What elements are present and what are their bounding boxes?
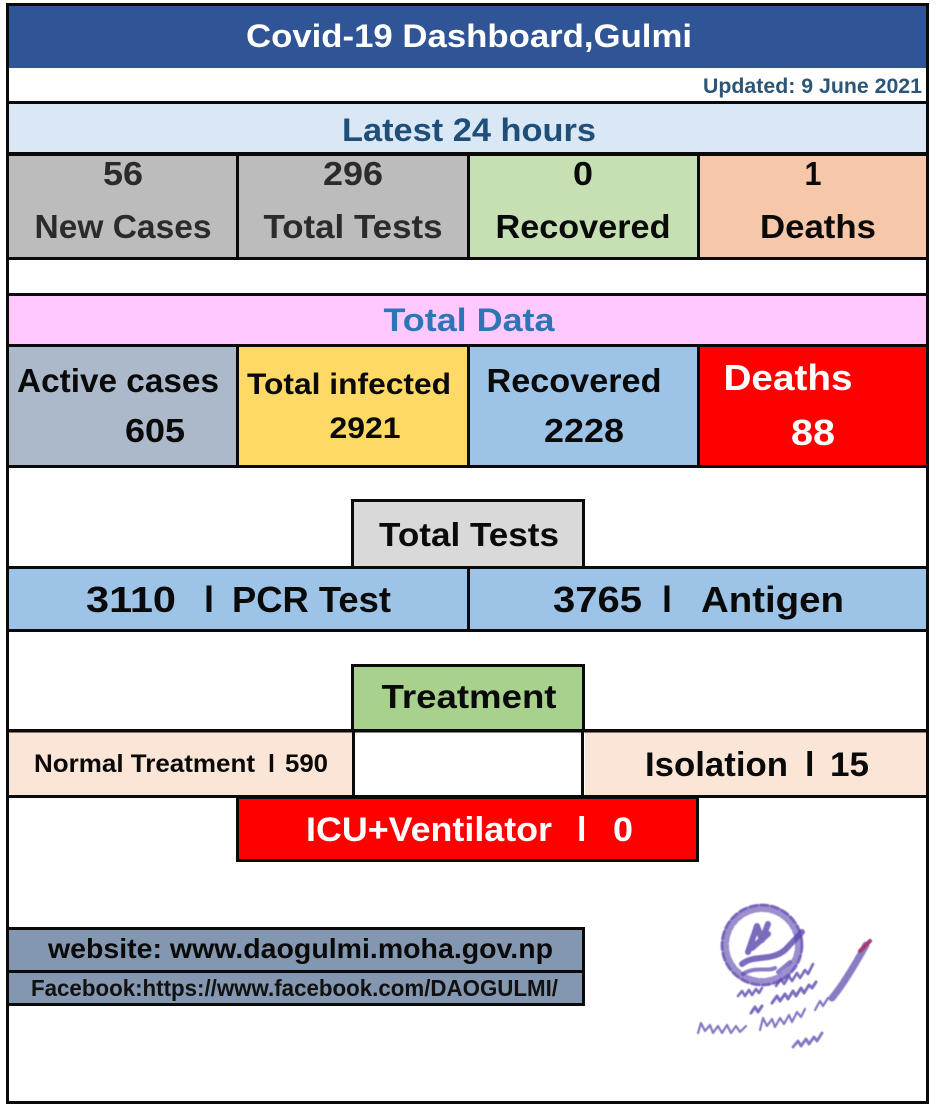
- normal treatment count: Normal Treatment: [34, 750, 256, 778]
- antigen count: Antigen: [701, 579, 844, 620]
- stat: total infected: Total infected: [247, 368, 451, 401]
- stat: total infected: 2921: [330, 412, 400, 445]
- total data heading: [9, 296, 926, 344]
- normal treatment count: l: [268, 750, 275, 778]
- stat: recovered total: Recovered: [486, 362, 662, 399]
- website link: website: www.daogulmi.moha.gov.np: [47, 933, 553, 964]
- normal treatment count: 590: [285, 750, 328, 778]
- normal treatment count: [9, 732, 352, 795]
- latest 24 hours heading: [9, 104, 926, 152]
- pcr test count: PCR Test: [232, 579, 391, 620]
- icu and ventilator count: l: [577, 811, 586, 849]
- section: total data: [9, 296, 926, 465]
- treatment heading: [352, 666, 584, 730]
- section: treatment: [9, 666, 926, 860]
- stat: active cases: 605: [125, 412, 185, 449]
- website link: [9, 930, 583, 971]
- stat: total infected: [239, 347, 467, 465]
- updated date: Updated: 9 June 2021: [703, 75, 922, 98]
- facebook link: Facebook:https://www.facebook.com/DAOGULMI/: [31, 975, 559, 1001]
- isolation count: Isolation: [645, 746, 788, 784]
- section: latest 24 hours: [9, 104, 926, 257]
- stat: total tests: [239, 155, 467, 257]
- stat: recovered: Recovered: [496, 208, 670, 245]
- website and facebook links: [7, 927, 585, 1006]
- stat: active cases: Active cases: [17, 362, 219, 399]
- stat: recovered: 0: [573, 155, 593, 192]
- antigen count: l: [662, 579, 672, 620]
- icu and ventilator count: [238, 798, 698, 860]
- stat: new cases: 56: [103, 155, 143, 192]
- stat: new cases: New Cases: [34, 208, 212, 245]
- total tests heading: Total Tests: [379, 516, 559, 553]
- total tests heading: [352, 500, 584, 568]
- latest 24 hours heading: Latest 24 hours: [342, 112, 596, 148]
- icon: office stamp: [698, 905, 870, 1047]
- icu and ventilator count: ICU+Ventilator: [306, 811, 552, 849]
- stat: recovered total: [469, 347, 697, 465]
- isolation count: 15: [830, 746, 869, 784]
- stat: deaths total: Deaths: [724, 357, 852, 398]
- stat: deaths: Deaths: [760, 208, 876, 245]
- section: total tests: [9, 500, 926, 629]
- stat: new cases: [9, 155, 237, 257]
- isolation count: [585, 732, 926, 795]
- antigen count: [470, 569, 926, 629]
- stat: deaths: 1: [804, 155, 822, 192]
- pcr test count: [9, 569, 467, 629]
- stat: recovered total: 2228: [544, 412, 624, 449]
- pcr test count: l: [204, 579, 214, 620]
- stat: recovered: [469, 155, 697, 257]
- treatment heading: Treatment: [382, 678, 557, 715]
- stat: total tests: Total Tests: [264, 208, 442, 245]
- stat: deaths total: [699, 347, 926, 465]
- icu and ventilator count: 0: [613, 811, 633, 849]
- title banner: Covid-19 Dashboard,Gulmi: [246, 18, 692, 54]
- title banner: [9, 6, 926, 68]
- total data heading: Total Data: [384, 302, 555, 338]
- pcr test count: 3110: [86, 579, 176, 620]
- isolation count: l: [805, 746, 814, 784]
- stat: deaths: [699, 155, 926, 257]
- stat: total tests: 296: [323, 155, 383, 192]
- stat: active cases: [9, 347, 237, 465]
- antigen count: 3765: [553, 579, 642, 620]
- stat: deaths total: 88: [791, 412, 835, 453]
